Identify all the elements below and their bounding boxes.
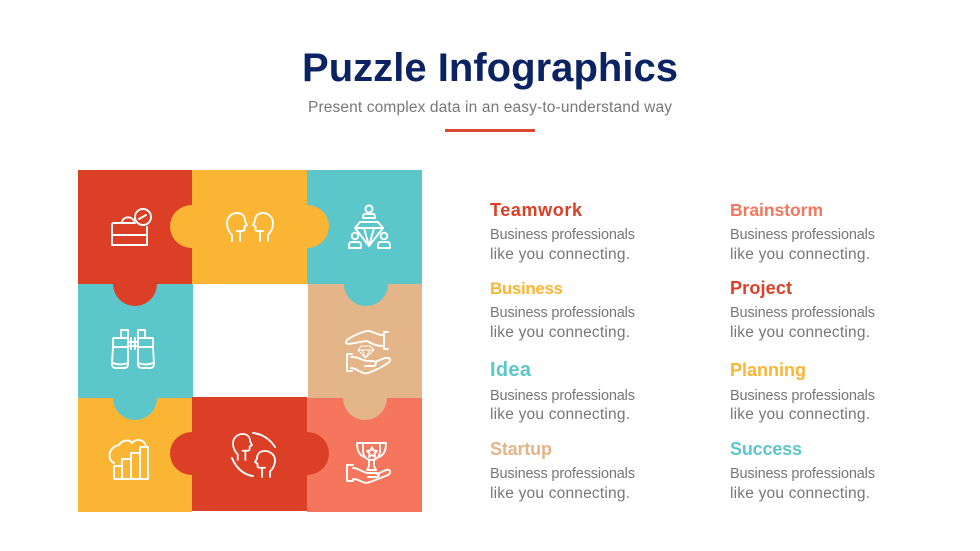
text block: Business: like you connecting. <box>490 324 630 341</box>
tab: tan into salmon <box>343 398 387 420</box>
tab: teal into yellow <box>113 398 157 420</box>
text block: Brainstorm: like you connecting. <box>730 246 870 263</box>
piece: yellow bottom left <box>78 398 192 512</box>
text block: Idea: Business professionals <box>490 388 635 404</box>
icon: two heads <box>227 213 273 241</box>
text block: Project: Project <box>730 278 792 298</box>
text block: Startup: like you connecting. <box>490 485 630 502</box>
text block: Business: Business <box>490 279 563 298</box>
piece: tan middle right <box>308 284 422 398</box>
icon: binoculars <box>112 330 154 368</box>
text block: Idea: like you connecting. <box>490 406 630 423</box>
text block: Idea: Idea <box>490 359 532 381</box>
text block: Planning: Planning <box>730 360 806 380</box>
text block: Project: Business professionals <box>730 305 875 321</box>
text block: Planning: like you connecting. <box>730 406 870 423</box>
text block: Success: Business professionals <box>730 466 875 482</box>
piece: salmon bottom right <box>307 398 422 512</box>
text block: Success: Success <box>730 439 802 459</box>
piece: teal top right <box>307 170 422 284</box>
text block: Startup <box>490 439 635 502</box>
text block: Planning <box>730 360 875 423</box>
piece: red top left <box>78 170 192 284</box>
text block: Teamwork <box>490 200 635 263</box>
text block: Project: like you connecting. <box>730 324 870 341</box>
piece: yellow top middle <box>170 170 329 284</box>
text block: Success: like you connecting. <box>730 485 870 502</box>
icon: cloud with bars <box>110 440 148 479</box>
tab: teal into tan <box>344 284 388 306</box>
text block: Teamwork: like you connecting. <box>490 246 630 263</box>
puzzle graphic <box>78 170 422 512</box>
text block: Startup: Business professionals <box>490 466 635 482</box>
icon: small diamond <box>358 346 374 358</box>
title accent line <box>445 129 535 132</box>
icon: trophy on hand <box>347 443 390 483</box>
text block: Startup: Startup <box>490 439 552 459</box>
subtitle: Present complex data in an easy-to-understand way <box>308 99 672 116</box>
icon: hands with diamond <box>346 331 390 373</box>
icon: heads in circle <box>232 433 275 477</box>
text block: Teamwork: Teamwork <box>490 200 583 220</box>
piece: teal middle left <box>78 284 193 398</box>
icon: cake with clock <box>112 209 151 245</box>
icon: diamond with team <box>349 205 390 248</box>
text block: Brainstorm: Business professionals <box>730 227 875 243</box>
piece: red bottom middle <box>170 397 329 511</box>
text block: Success <box>730 439 875 502</box>
text block: Business <box>490 279 635 341</box>
text block: Business: Business professionals <box>490 305 635 321</box>
text block: Brainstorm <box>730 200 875 263</box>
text block: Project <box>730 278 875 341</box>
text block: Idea <box>490 359 635 423</box>
text block: Brainstorm: Brainstorm <box>730 200 823 220</box>
text block: Teamwork: Business professionals <box>490 227 635 243</box>
tab: red into teal <box>113 284 157 306</box>
text block: Planning: Business professionals <box>730 388 875 404</box>
title: Puzzle Infographics <box>302 46 678 90</box>
